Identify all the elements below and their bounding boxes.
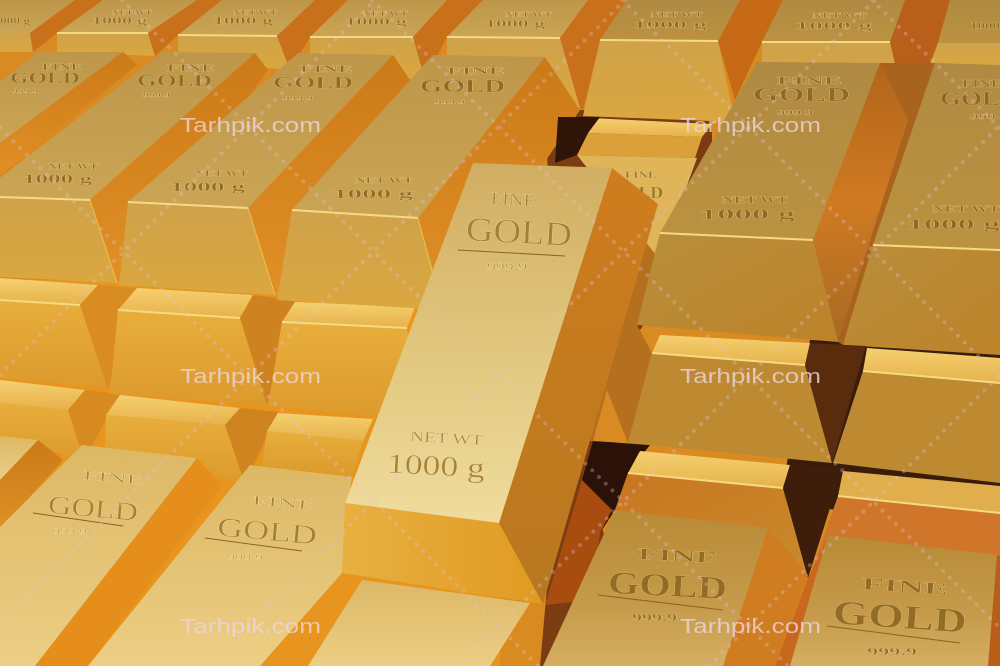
far bar 7: NET WT xyxy=(812,12,868,20)
far bar 1: 000 g xyxy=(0,16,30,27)
bar: far-right large bar: 999. xyxy=(970,113,1000,121)
bar: large right bar: GOLD xyxy=(753,84,850,106)
bar: large right bar: FINE xyxy=(777,75,842,87)
watermark labels: Tarhpik.com xyxy=(680,616,821,638)
far bar 2: 1000 g xyxy=(92,16,147,27)
bar: lower far-right stacked bar xyxy=(810,471,1000,575)
bar: leftmost large bar, cut off: GOLD xyxy=(10,70,80,87)
far bar 3: NET WT xyxy=(233,9,278,17)
bar: large bar 3: 1000 g xyxy=(333,186,414,201)
bar: far-right large bar: NET WT xyxy=(932,204,1000,214)
far bar 2: NET WT xyxy=(112,9,152,17)
far bar 7 xyxy=(762,0,950,120)
bar: large right bar xyxy=(637,62,908,342)
bar: large bar 3: NET WT xyxy=(355,176,414,185)
bar: central tilted gold bar: GOLD xyxy=(465,211,573,254)
far bar 6: NET WT xyxy=(650,11,704,19)
watermark labels: Tarhpik.com xyxy=(180,616,321,638)
far bar 5: NET WT xyxy=(505,11,553,19)
far bar 6: 1000 g xyxy=(633,19,708,31)
bar: leftmost large bar, cut off: FINE xyxy=(42,62,82,72)
bar: large bar 3 xyxy=(277,55,580,310)
bar: far-right large bar: FINE xyxy=(962,78,1000,90)
bar: central tilted gold bar: 1000 g xyxy=(386,448,486,485)
bar: large bar 2 xyxy=(119,53,410,295)
watermark labels xyxy=(180,115,821,638)
bar: far-right large bar xyxy=(843,63,1000,355)
bar: bottom-left gold bar: FINE xyxy=(83,467,144,488)
bar: large bar 1: 1000 g xyxy=(23,171,93,186)
far bar 4: NET WT xyxy=(363,10,409,18)
bar: second bottom gold bar: 999.9 xyxy=(227,553,263,562)
far bar 8 xyxy=(930,0,1000,66)
bar: bottom-left gold bar: 999.9 xyxy=(52,527,87,536)
bar: lower right stacked bar xyxy=(615,451,842,578)
far bar 7: 1000 g xyxy=(795,20,873,32)
bar: large bar 3: FINE xyxy=(447,66,505,76)
watermark labels: Tarhpik.com xyxy=(180,366,321,388)
bar: right stacked bar under far-right bar xyxy=(833,348,1000,483)
watermark labels: Tarhpik.com xyxy=(680,115,821,137)
bar: bar under the central bar xyxy=(308,580,530,666)
far bar 3: 1000 g xyxy=(213,16,273,27)
far bar 5 xyxy=(447,0,627,110)
bar: leftmost large bar, cut off: 999.9 xyxy=(12,89,38,95)
bar: large bar 3: 999.9 xyxy=(435,100,465,106)
bars behind the central bar xyxy=(545,117,712,605)
bar row 4: far-left stacked bars xyxy=(0,380,373,484)
bar: gap between large right bars xyxy=(813,63,935,345)
bar: large right bar: NET WT xyxy=(722,195,788,205)
bars behind the central bar: FINE xyxy=(625,170,657,180)
bar: large bar 2: FINE xyxy=(300,64,353,74)
far bar 4 xyxy=(310,0,483,80)
bar: large right bar: 999.9 xyxy=(777,109,814,117)
bar row 1: far bars along top edge xyxy=(0,0,1000,122)
bar: bottom centre-right bar xyxy=(543,510,808,666)
bar: bottom right bar: FINE xyxy=(861,574,948,599)
far bar 1 xyxy=(0,0,103,52)
bar: far-right large bar: 1000 g xyxy=(907,217,1000,233)
bar: large bar 1: NET WT xyxy=(48,162,99,171)
bar: large bar 2: NET WT xyxy=(195,169,249,178)
bar: large bar 1 xyxy=(0,52,268,283)
bar: central tilted gold bar: FINE xyxy=(490,189,536,210)
bar: large bar 2: GOLD xyxy=(273,73,353,92)
bar: bottom centre-right bar: GOLD xyxy=(607,564,728,606)
bar: bottom centre-right bar: 999.9 xyxy=(632,613,677,624)
bar: large bar 2: 999.9 xyxy=(283,96,313,102)
bar: second bottom gold bar: GOLD xyxy=(216,512,318,550)
bar: bottom far-left sliver xyxy=(0,436,63,530)
bar: central tilted gold bar xyxy=(342,163,658,604)
bar: bottom right bar: 999.9 xyxy=(867,646,918,658)
bar: bottom right bar: GOLD xyxy=(832,594,968,641)
bar: second bottom gold bar xyxy=(88,465,352,666)
far bar 8: 1000 xyxy=(970,20,1000,32)
bar: bottom-left gold bar: GOLD xyxy=(47,490,139,527)
bar: leftmost large bar, cut off xyxy=(0,52,137,175)
bar: large bar 3: GOLD xyxy=(420,76,505,96)
bar: second bottom gold bar: FINE xyxy=(252,492,316,513)
bar: large bar 1: 999.9 xyxy=(143,93,170,99)
bar: bottom-left gold bar xyxy=(0,445,222,666)
far bar 4: 1000 g xyxy=(345,17,407,28)
bars behind the central bar: OLD xyxy=(625,183,663,202)
bar: central tilted gold bar: 999.9 xyxy=(487,262,527,273)
bar: large bar 1: FINE xyxy=(167,63,215,73)
bar: large right bar: 1000 g xyxy=(700,207,796,223)
bar: central tilted gold bar: NET WT xyxy=(410,429,483,449)
bar: large bar 2: 1000 g xyxy=(170,179,246,194)
watermark labels: Tarhpik.com xyxy=(680,366,821,388)
far bar 2 xyxy=(57,0,222,56)
bar: bottom right bar xyxy=(790,535,1000,666)
bar: bottom centre-right bar: FINE xyxy=(638,546,718,567)
bar: large bar 1: GOLD xyxy=(137,71,212,90)
bar: right stacked bar under large right bar xyxy=(628,335,866,463)
watermark labels: Tarhpik.com xyxy=(180,115,321,137)
bar row 3: stacked bars beneath the large bars xyxy=(0,278,420,420)
bar: far-right large bar: GOL xyxy=(940,88,1000,110)
far bar 3 xyxy=(178,0,348,70)
far bar 6 xyxy=(583,0,783,122)
far bar 5: 1000 g xyxy=(485,19,545,30)
